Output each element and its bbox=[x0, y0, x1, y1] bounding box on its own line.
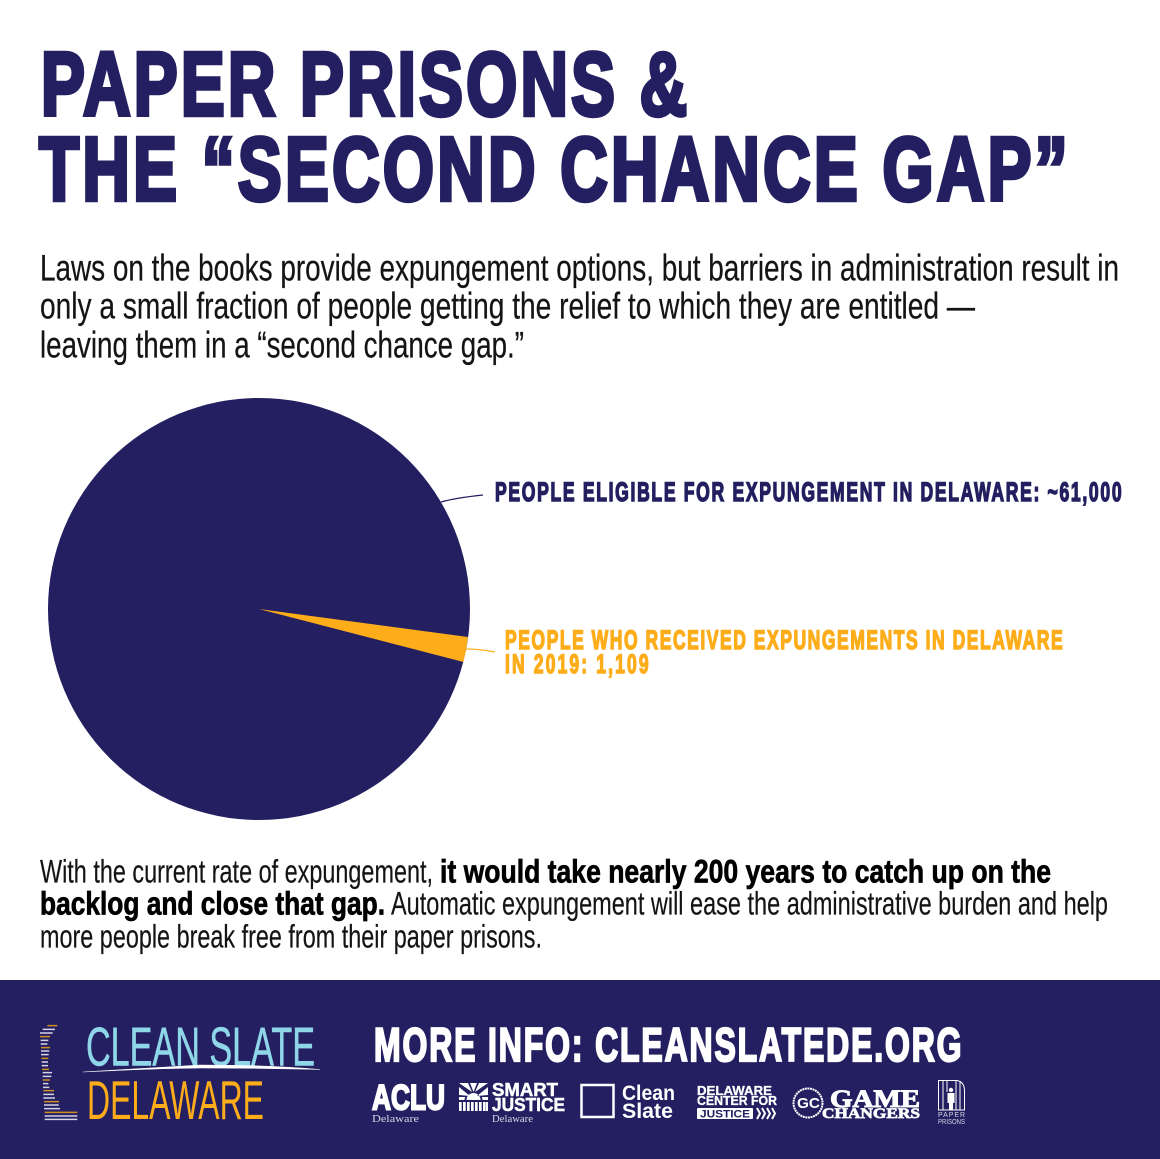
logo: Clean Slate bbox=[582, 1082, 675, 1123]
more info heading: MORE INFO: CLEANSLATEDE.ORG bbox=[374, 1019, 962, 1072]
logo: Paper Prisons: PRISONS bbox=[938, 1119, 965, 1126]
logo: Delaware Center for Justice: CENTER FOR bbox=[697, 1094, 777, 1108]
icon: GC seal: GC bbox=[797, 1095, 820, 1112]
logo: ACLU Delaware bbox=[372, 1078, 445, 1125]
title: PAPER PRISONS & bbox=[41, 34, 687, 134]
logo: Smart Justice Delaware: JUSTICE bbox=[492, 1095, 565, 1115]
logo: ACLU Delaware: ACLU bbox=[372, 1078, 445, 1118]
pie chart bbox=[48, 398, 470, 820]
intro text block bbox=[40, 248, 1119, 366]
label: people who received expungements bbox=[505, 624, 1063, 679]
logo: Game Changers bbox=[794, 1086, 920, 1122]
logo: Clean Slate: Clean bbox=[622, 1082, 675, 1105]
logo: brush stroke bbox=[83, 1065, 320, 1072]
label: people who received expungements: PEOPLE WHO RECEIVED EXPUNGEMENTS IN DELAWARE bbox=[505, 624, 1063, 655]
logo: Smart Justice Delaware: SMART bbox=[492, 1080, 558, 1100]
icon: figure behind bars bbox=[938, 1080, 964, 1110]
conclusion text block bbox=[40, 854, 1108, 954]
logo: Paper Prisons bbox=[938, 1080, 965, 1126]
title bbox=[39, 34, 1068, 219]
logo: Clean Slate wordmark: CLEAN SLATE bbox=[86, 1016, 315, 1078]
logo: Delaware Center for Justice: JUSTICE bbox=[700, 1108, 750, 1120]
intro text block: leaving them in a “second chance gap.” bbox=[40, 324, 524, 366]
logo: Delaware state bars bbox=[40, 1026, 77, 1119]
logo: Smart Justice Delaware: Delaware bbox=[492, 1114, 534, 1125]
logo: Smart Justice Delaware bbox=[459, 1080, 565, 1125]
leader line: received bbox=[466, 649, 495, 652]
logo: Delaware wordmark: DELAWARE bbox=[87, 1069, 264, 1131]
icon: chevrons bbox=[757, 1108, 775, 1119]
conclusion text block: With the current rate of expungement, bbox=[40, 854, 433, 890]
title: THE “SECOND CHANCE GAP” bbox=[39, 119, 1068, 219]
logo: Paper Prisons: PAPER bbox=[938, 1112, 965, 1119]
logo: Delaware Center for Justice: DELAWARE bbox=[697, 1084, 772, 1098]
conclusion text block: more people break free from their paper prisons. bbox=[40, 918, 542, 954]
footer band bbox=[0, 980, 1160, 1159]
logo: Game Changers: CHANGERS bbox=[822, 1106, 920, 1122]
leader line: eligible bbox=[441, 495, 483, 502]
logo: Clean Slate: Slate bbox=[622, 1100, 673, 1123]
icon: sun and bars bbox=[459, 1083, 488, 1111]
label: people who received expungements: IN 2019: 1,109 bbox=[505, 648, 649, 679]
conclusion text block: it would take nearly 200 years to catch up on the bbox=[440, 854, 1051, 890]
logo: ACLU Delaware: Delaware bbox=[372, 1113, 419, 1125]
conclusion text block: backlog and close that gap. bbox=[40, 886, 385, 922]
logo: Game Changers: GAME bbox=[830, 1086, 920, 1113]
logo: Delaware Center for Justice bbox=[697, 1084, 777, 1120]
label: people eligible: PEOPLE ELIGIBLE FOR EXPUNGEMENT IN DELAWARE: ~61,000 bbox=[495, 476, 1122, 507]
